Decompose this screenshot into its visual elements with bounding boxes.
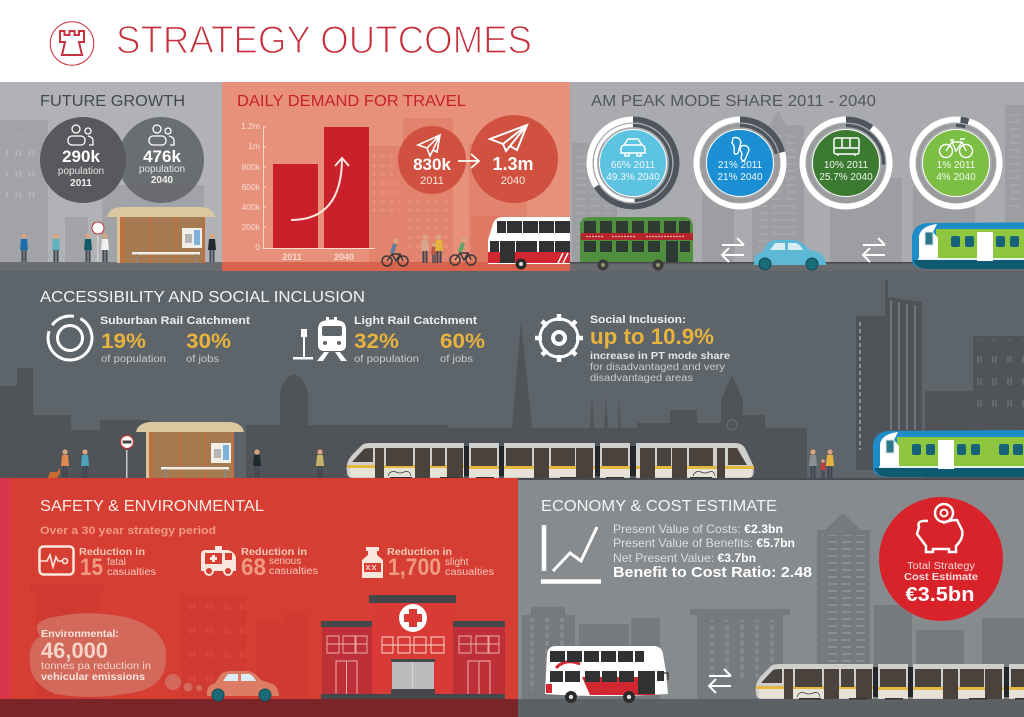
heading: future growth: FUTURE GROWTH bbox=[40, 93, 185, 110]
stat: fatal casualties: 15 bbox=[80, 554, 103, 581]
panel: daily demand for travel bbox=[222, 82, 570, 271]
light rail catchment stats: of jobs bbox=[440, 354, 473, 365]
donut: walking bbox=[696, 120, 784, 206]
social inclusion text: Social Inclusion: bbox=[590, 314, 686, 326]
heading: am peak mode share: AM PEAK MODE SHARE 2011 - 2040 bbox=[591, 93, 876, 110]
circle: population 2040: 2040 bbox=[151, 175, 174, 186]
bus stop sign bbox=[92, 222, 104, 262]
panel: accessibility and social inclusion bbox=[0, 271, 1024, 480]
icon: suburban rail ring bbox=[40, 308, 100, 368]
bar chart: daily demand: 1m bbox=[248, 141, 260, 151]
arrow: exchange car train bbox=[863, 238, 885, 262]
economic figures bbox=[613, 522, 812, 581]
heading: daily demand: DAILY DEMAND FOR TRAVEL bbox=[237, 93, 466, 110]
stat: serious casualties: Reduction in bbox=[241, 546, 307, 558]
blue and green train bbox=[873, 430, 1024, 477]
ground: demand bbox=[222, 262, 570, 271]
light rail catchment stats: of population bbox=[354, 354, 419, 365]
stat: slight casualties: slight bbox=[445, 557, 469, 568]
pedestrians bbox=[20, 233, 216, 262]
header logo bbox=[50, 22, 94, 65]
panel: am peak mode share bbox=[570, 82, 1024, 271]
cyclists and family bbox=[382, 234, 476, 266]
ground: am peak bbox=[570, 262, 1024, 271]
bus shelter bbox=[107, 207, 215, 263]
circle: population 2011: population bbox=[58, 166, 104, 177]
circle: 830k 2011: 830k bbox=[413, 155, 451, 174]
callout: environmental emissions cloud: 46,000 bbox=[41, 638, 108, 663]
callout: environmental emissions cloud bbox=[30, 613, 202, 697]
skyline: economy bbox=[522, 513, 1024, 699]
callout: environmental emissions cloud: Environmental: bbox=[41, 628, 119, 640]
economic figures: Benefit to Cost Ratio: 2.48 bbox=[613, 564, 812, 581]
donut: car: 66% 2011 bbox=[611, 160, 656, 171]
bar chart: daily demand: 400k bbox=[242, 202, 261, 212]
icon: car bbox=[621, 139, 645, 156]
stat: serious casualties: 68 bbox=[241, 554, 266, 581]
stat: fatal casualties: casualties bbox=[107, 567, 156, 578]
social inclusion text bbox=[590, 314, 730, 384]
skyline: safety bbox=[30, 584, 309, 699]
bus shelter bbox=[136, 422, 244, 478]
icon: heart monitor bbox=[40, 546, 74, 574]
suburban rail catchment stats: Suburban Rail Catchment bbox=[100, 315, 250, 327]
orange car bbox=[207, 671, 279, 701]
circle: population 2040 bbox=[118, 117, 204, 203]
stat: serious casualties: serious bbox=[269, 556, 301, 567]
arrow: exchange bus car bbox=[722, 238, 744, 262]
economic figures: Present Value of Benefits: €5.7bn bbox=[613, 536, 795, 550]
donut: cycling: 1% 2011 bbox=[937, 160, 976, 171]
skyline: demand bbox=[369, 118, 527, 262]
road edge bbox=[518, 478, 1024, 480]
skyline: am peak bbox=[572, 105, 1024, 262]
stat: fatal casualties bbox=[79, 546, 156, 581]
circle: 1.3m 2040: 1.3m bbox=[492, 154, 534, 174]
circle: population 2011: 2011 bbox=[70, 178, 92, 189]
ground: future growth bbox=[0, 262, 222, 271]
circle: population 2040: population bbox=[139, 164, 185, 175]
arrow: exchange bus tram bbox=[709, 669, 731, 693]
icon: piggy bank and coin bbox=[917, 504, 962, 552]
heading: economy: ECONOMY & COST ESTIMATE bbox=[541, 498, 777, 515]
skyline: landmarks bbox=[0, 280, 1024, 478]
donut: walking: 21% 2040 bbox=[717, 172, 763, 183]
circle: population 2040: 476k bbox=[143, 147, 181, 166]
suburban rail catchment stats: of jobs bbox=[186, 354, 219, 365]
callout: total strategy cost estimate: €3.5bn bbox=[906, 584, 974, 606]
stat: slight casualties: 1,700 bbox=[388, 554, 441, 581]
donut: car: 49.3% 2040 bbox=[606, 172, 660, 183]
ground: safety bbox=[0, 699, 518, 717]
stat: fatal casualties: fatal bbox=[107, 557, 126, 568]
title: STRATEGY OUTCOMES bbox=[116, 19, 532, 62]
panel: economy and cost estimate bbox=[518, 480, 1024, 717]
heading: safety: SAFETY & ENVIRONMENTAL bbox=[40, 498, 264, 515]
circle: 1.3m 2040: 2040 bbox=[501, 175, 525, 187]
donut: bus bbox=[802, 120, 890, 206]
bar chart: daily demand: 0 bbox=[255, 242, 260, 252]
arrow: 830k to 1.3m bbox=[458, 154, 479, 168]
icon: social inclusion gear bbox=[535, 314, 583, 362]
light rail catchment stats bbox=[354, 315, 485, 365]
arrow: growth curve bbox=[291, 158, 349, 220]
stat: fatal casualties: Reduction in bbox=[79, 546, 145, 558]
pedestrians bbox=[48, 449, 834, 478]
social inclusion text: for disadvantaged and very bbox=[590, 361, 726, 373]
icon: medicine bottle bbox=[362, 547, 383, 578]
bar chart: daily demand: 200k bbox=[242, 222, 261, 232]
light rail catchment stats: 60% bbox=[440, 330, 485, 353]
social inclusion text: disadvantaged areas bbox=[590, 372, 693, 384]
donut: bus: 10% 2011 bbox=[824, 160, 869, 171]
donut: cycling: 4% 2040 bbox=[936, 172, 976, 183]
hospital bbox=[321, 595, 505, 699]
stat: slight casualties: casualties bbox=[445, 567, 494, 578]
green double-decker bus bbox=[580, 217, 693, 270]
social inclusion text: increase in PT mode share bbox=[590, 350, 730, 362]
callout: total strategy cost estimate: Cost Estimate bbox=[904, 572, 978, 583]
donut: walking: 21% 2011 bbox=[718, 160, 763, 171]
bar chart: daily demand: 2040 bbox=[334, 252, 354, 262]
suburban rail catchment stats bbox=[100, 315, 250, 365]
circle: 1.3m 2040 bbox=[470, 115, 558, 203]
donut: bus: 25.7% 2040 bbox=[819, 172, 873, 183]
economic figures: Present Value of Costs: €2.3bn bbox=[613, 522, 783, 536]
icon: footprints bbox=[732, 138, 749, 161]
light rail catchment stats: Light Rail Catchment bbox=[354, 315, 477, 327]
suburban rail catchment stats: of population bbox=[101, 354, 166, 365]
blue and green train bbox=[912, 222, 1024, 269]
icon: bus bbox=[834, 138, 859, 156]
subheading: strategy period: Over a 30 year strategy period bbox=[40, 525, 216, 537]
stat: slight casualties: Reduction in bbox=[387, 546, 452, 558]
social inclusion text: up to 10.9% bbox=[590, 324, 714, 349]
callout: environmental emissions cloud: vehicular emissions bbox=[41, 672, 145, 683]
teal car bbox=[754, 240, 826, 270]
bus stop sign bbox=[120, 436, 134, 478]
heading: accessibility: ACCESSIBILITY AND SOCIAL INCLUSION bbox=[40, 289, 365, 306]
suburban rail catchment stats: 30% bbox=[186, 330, 231, 353]
stat: slight casualties bbox=[387, 546, 494, 581]
icon: line chart bbox=[541, 525, 601, 582]
icon: light rail stop and tram bbox=[293, 317, 347, 361]
background: white header bbox=[0, 0, 1024, 82]
circle: population 2011 bbox=[40, 117, 126, 203]
skyline: future growth bbox=[0, 120, 204, 262]
callout: total strategy cost estimate: Total Strategy bbox=[907, 561, 975, 572]
bar chart: daily demand bbox=[241, 121, 375, 262]
circle: 830k 2011 bbox=[398, 126, 466, 194]
circle: 830k 2011: 2011 bbox=[420, 175, 444, 187]
icon: bicycle bbox=[940, 139, 972, 158]
light rail catchment stats: 32% bbox=[354, 330, 399, 353]
bar chart: daily demand: 800k bbox=[242, 162, 261, 172]
bar chart: daily demand: 1.2m bbox=[241, 121, 260, 131]
callout: total strategy cost estimate bbox=[879, 497, 1003, 621]
callout: environmental emissions cloud: tonnes pa reduction in bbox=[41, 661, 151, 672]
red double-decker bus bbox=[488, 217, 570, 270]
panel: future growth bbox=[0, 82, 222, 271]
light rail tram bbox=[347, 443, 754, 478]
economic figures: Net Present Value: €3.7bn bbox=[613, 551, 756, 565]
stat: serious casualties bbox=[241, 546, 318, 581]
panel: safety and environmental bbox=[0, 478, 518, 717]
red and white double-decker bus bbox=[545, 646, 668, 703]
donut: cycling bbox=[908, 115, 1004, 211]
icon: ambulance bbox=[201, 546, 236, 575]
circle: population 2011: 290k bbox=[62, 147, 100, 166]
bar chart: daily demand: 2011 bbox=[282, 252, 302, 262]
light rail tram bbox=[756, 664, 1024, 700]
stat: serious casualties: casualties bbox=[269, 566, 318, 577]
suburban rail catchment stats: 19% bbox=[101, 330, 146, 353]
donut: car bbox=[590, 120, 676, 206]
ground: economy bbox=[518, 699, 1024, 717]
bar chart: daily demand: 600k bbox=[242, 182, 261, 192]
